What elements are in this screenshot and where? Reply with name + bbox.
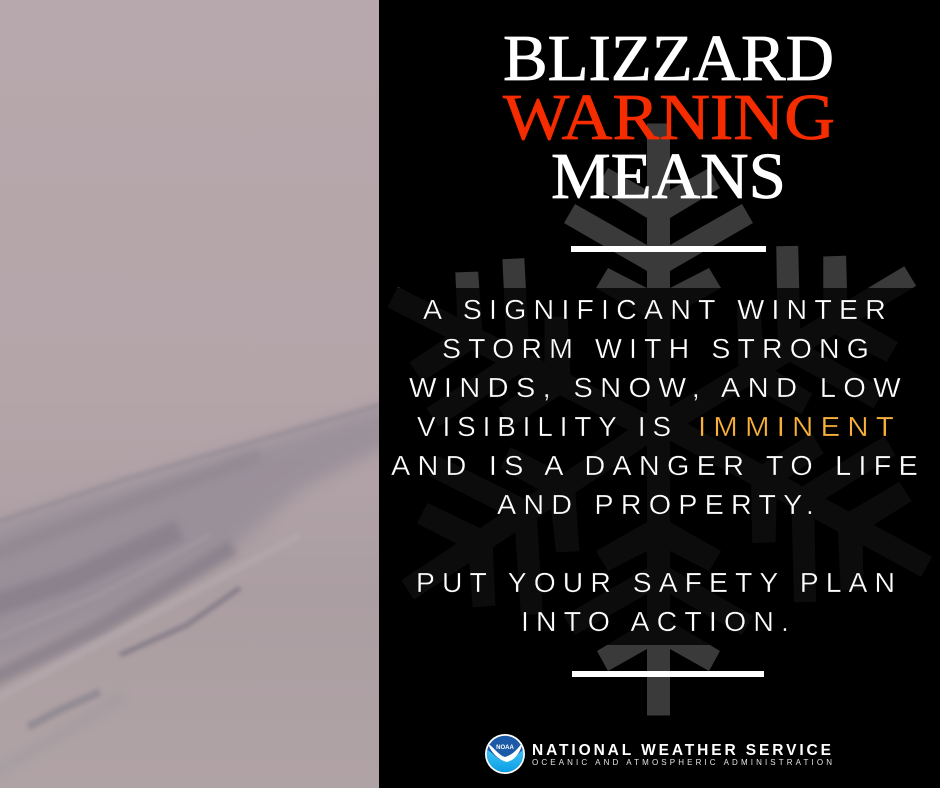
top rule: [571, 246, 766, 252]
logo text: national weather service: NATIONAL WEATHER SERVICE: [532, 742, 831, 759]
title line: means: MEANS: [551, 140, 786, 213]
dark text band over snowflake: [379, 288, 940, 645]
photo: blizzard whiteout over a snowy road: [0, 0, 420, 788]
icon: NOAA logo: [485, 734, 525, 774]
body text: warning description: A SIGNIFICANT WINTER: [423, 294, 893, 325]
body text: call to action: PUT YOUR SAFETY PLAN: [416, 567, 902, 598]
panel: black background: [379, 0, 940, 788]
title: [503, 22, 835, 213]
highlighted word: imminent: IMMINENT: [698, 411, 901, 442]
icon: NOAA logo: NOAA: [496, 745, 514, 751]
snowflake watermark: [350, 124, 940, 716]
body text: warning description: AND IS A DANGER TO LIFE: [391, 450, 925, 481]
body text: call to action: INTO ACTION.: [521, 606, 796, 637]
body text: warning description: AND PROPERTY.: [497, 489, 821, 520]
body text: warning description: VISIBILITY IS: [417, 411, 678, 442]
title line: blizzard: BLIZZARD: [503, 22, 834, 95]
body text: call to action: [416, 567, 902, 637]
title line: warning: WARNING: [503, 81, 835, 154]
body text: warning description: STORM WITH STRONG: [442, 333, 876, 364]
body text: warning description: WINDS, SNOW, AND LOW: [409, 372, 908, 403]
bottom rule: [572, 671, 764, 677]
body text: warning description: [391, 294, 925, 520]
logo text: oceanic and atmospheric administration: OCEANIC AND ATMOSPHERIC ADMINISTRATION: [532, 758, 832, 767]
